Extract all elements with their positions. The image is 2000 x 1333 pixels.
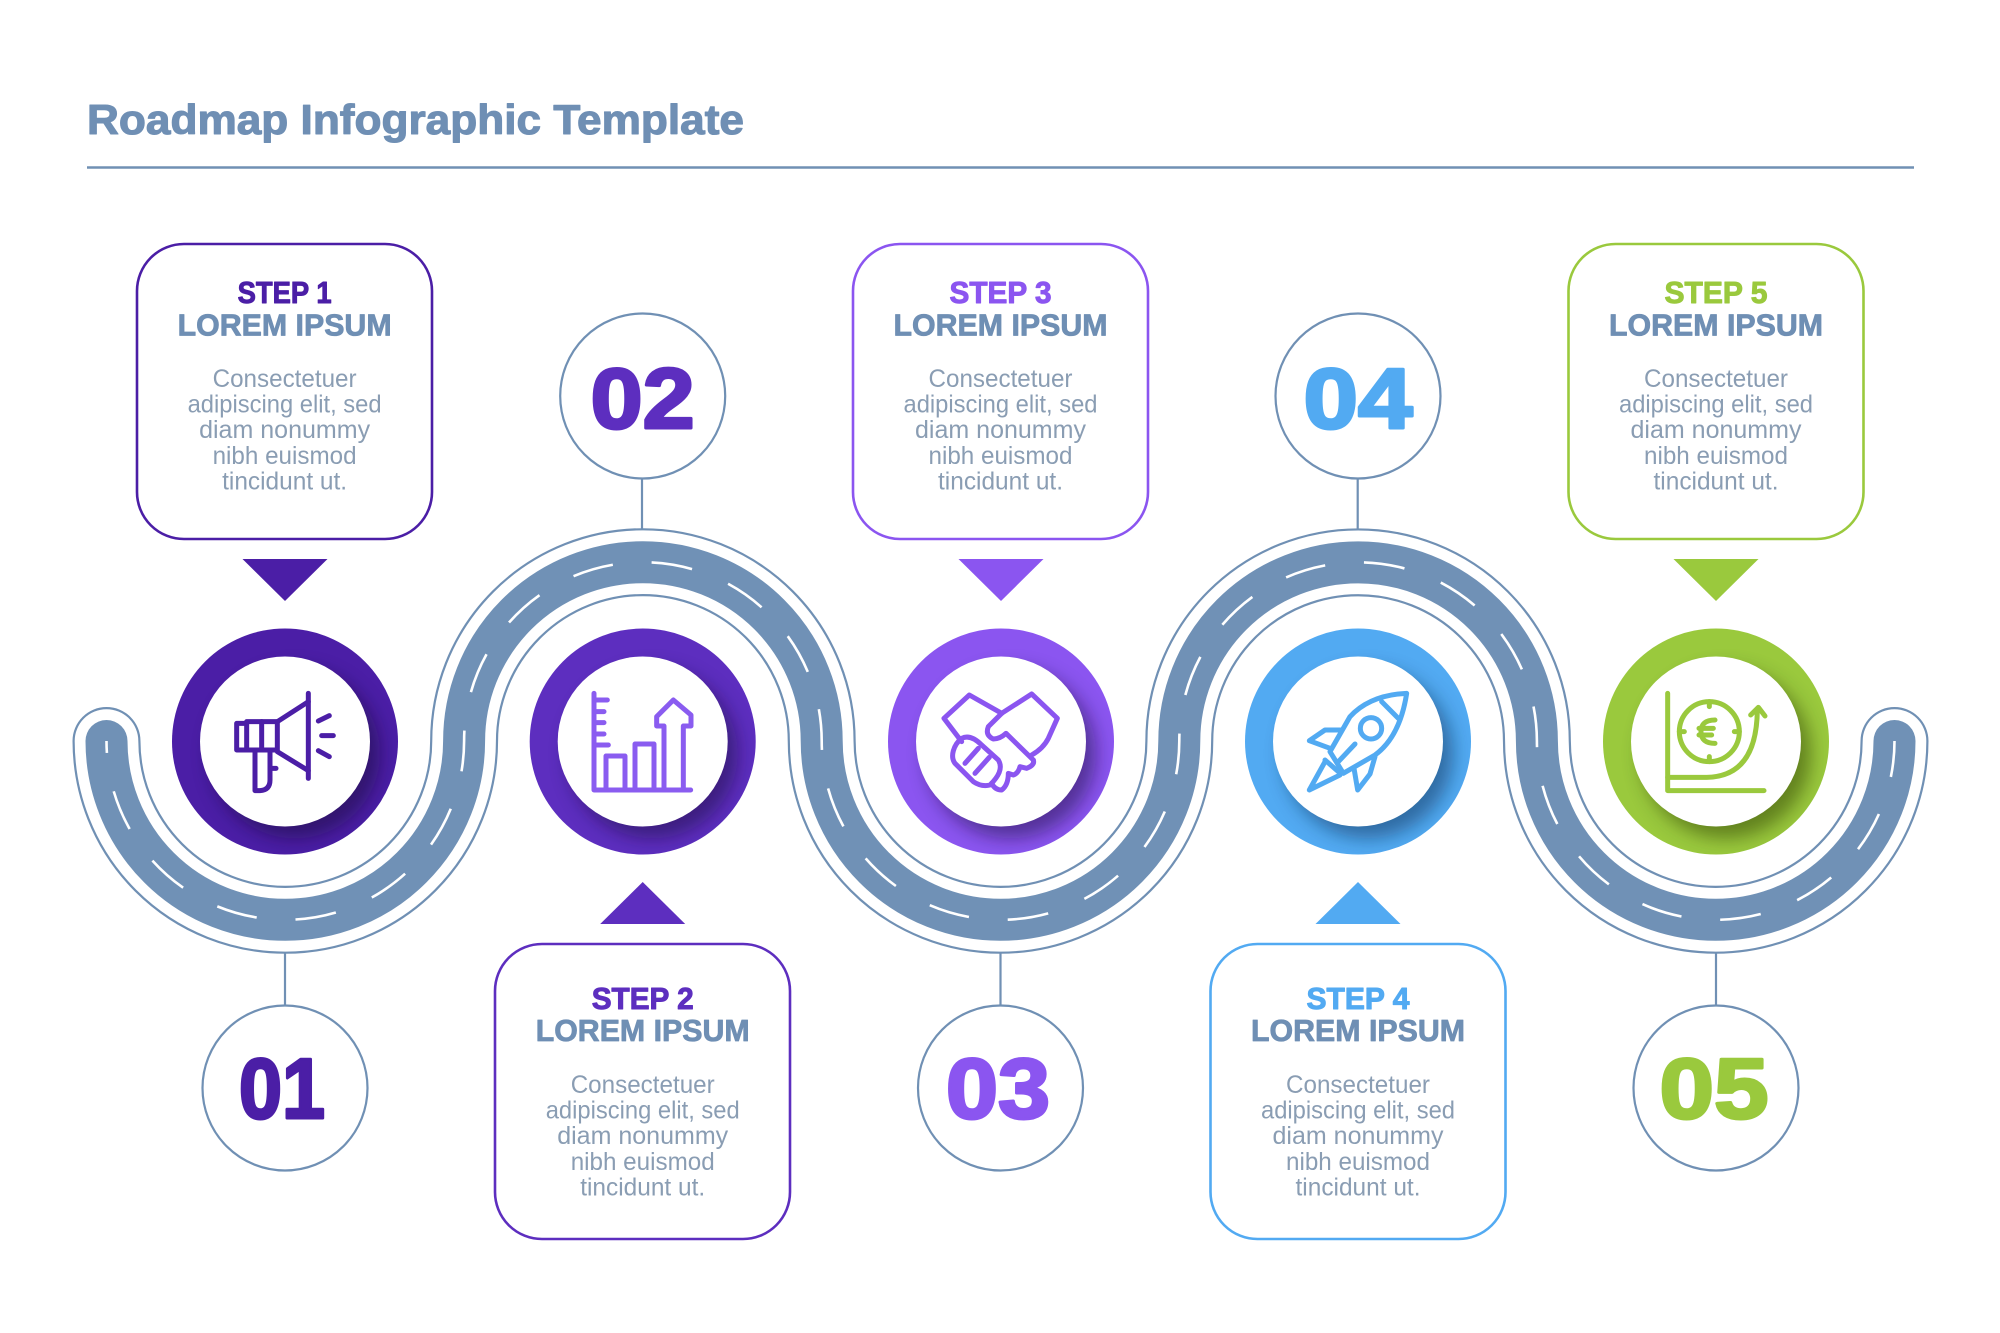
step 5 ring [1603, 628, 1829, 854]
step 5 card: nibh euismod [1644, 442, 1788, 470]
step 2 card: diam nonummy [557, 1122, 729, 1150]
step 4 number badge [1276, 314, 1440, 530]
step 1 card: Consectetuer [213, 365, 357, 393]
step 1 card: diam nonummy [199, 416, 371, 444]
step 3 ring [888, 628, 1114, 854]
icon: megaphone [237, 693, 333, 791]
step 5 arrow [1674, 559, 1758, 601]
step 2 arrow [600, 882, 685, 924]
step 2 card [495, 944, 790, 1239]
step 3 arrow [958, 559, 1044, 601]
step 1 ring [172, 628, 398, 854]
step 5 card: diam nonummy [1630, 416, 1802, 444]
step 3 card: tincidunt ut. [938, 467, 1063, 495]
step 3 group [853, 244, 1148, 1170]
step 5 number badge [1634, 953, 1798, 1170]
step 2 card: STEP 2 [592, 981, 694, 1016]
icon: handshake [944, 694, 1057, 790]
step 3 card: diam nonummy [915, 416, 1086, 444]
step 5 card: tincidunt ut. [1654, 467, 1778, 495]
step 4 arrow [1316, 882, 1400, 924]
step 2 card: LOREM IPSUM [536, 1013, 750, 1048]
step 5 card: LOREM IPSUM [1609, 308, 1823, 342]
winding road [106, 562, 1894, 920]
step 4 number badge: 04 [1304, 352, 1412, 447]
step 3 card: STEP 3 [950, 275, 1052, 310]
step 3 card: Consectetuer [928, 365, 1072, 393]
step 2 ring [530, 628, 756, 854]
step 1 card: STEP 1 [238, 275, 332, 310]
step 3 number badge [918, 953, 1083, 1170]
roadmap infographic [72, 103, 1928, 1240]
step 1 card: adipiscing elit, sed [188, 391, 382, 419]
step 1 card: LOREM IPSUM [178, 308, 392, 342]
title: Roadmap Infographic Template [87, 96, 744, 143]
step 4 card: adipiscing elit, sed [1261, 1097, 1455, 1125]
step 2 number badge: 02 [591, 352, 695, 447]
step 2 number badge [560, 314, 725, 530]
step 5 card [1568, 244, 1864, 539]
step 3 card: LOREM IPSUM [894, 308, 1108, 342]
step 1 number badge: 01 [239, 1042, 325, 1137]
step 4 card: LOREM IPSUM [1251, 1013, 1465, 1048]
step 1 card: tincidunt ut. [222, 467, 347, 495]
step 2 card: adipiscing elit, sed [546, 1097, 740, 1125]
step 5 card: adipiscing elit, sed [1619, 391, 1813, 419]
icon: bar chart with arrow [594, 693, 691, 790]
step 2 card: nibh euismod [571, 1148, 715, 1176]
step 4 card [1210, 944, 1506, 1239]
step 1 card [137, 244, 432, 539]
step 3 card: nibh euismod [928, 442, 1072, 470]
step 5 group [1568, 244, 1864, 1170]
step 3 number badge: 03 [946, 1042, 1050, 1137]
step 2 card: Consectetuer [571, 1071, 715, 1099]
icon: euro growth chart [1668, 693, 1765, 791]
step 1 card: nibh euismod [213, 442, 357, 470]
step 3 card: adipiscing elit, sed [904, 391, 1098, 419]
step 3 card [853, 244, 1148, 539]
step 2 group [495, 314, 790, 1239]
step 1 group [137, 244, 432, 1170]
step 4 card: diam nonummy [1272, 1122, 1444, 1150]
step 4 ring [1245, 628, 1471, 854]
step 5 number badge: 05 [1660, 1042, 1768, 1137]
step 4 card: STEP 4 [1306, 981, 1410, 1016]
step 4 group [1210, 314, 1506, 1239]
step 2 card: tincidunt ut. [580, 1173, 705, 1201]
step 4 card: tincidunt ut. [1296, 1173, 1420, 1201]
step 4 card: nibh euismod [1286, 1148, 1430, 1176]
step 5 card: STEP 5 [1664, 275, 1768, 310]
step 1 arrow [242, 559, 328, 601]
step 4 card: Consectetuer [1286, 1071, 1430, 1099]
icon: rocket [1309, 693, 1407, 790]
step 5 card: Consectetuer [1644, 365, 1788, 393]
step 1 number badge [202, 953, 368, 1170]
